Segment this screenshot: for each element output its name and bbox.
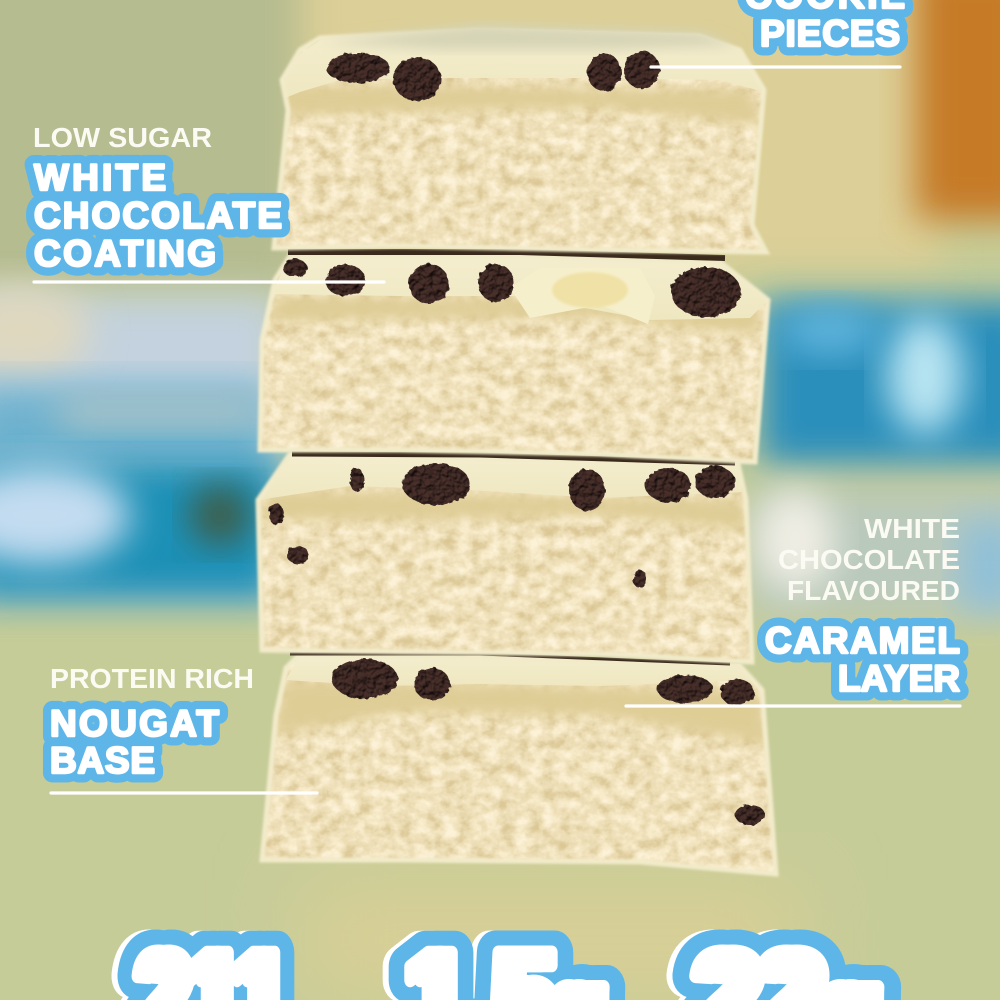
- label: caramel layer: CARAMEL: [765, 620, 960, 661]
- bar 2: second: [260, 252, 768, 462]
- label: cookie pieces: PIECES: [760, 13, 900, 54]
- label: caramel layer: CARAMEL: [765, 620, 960, 661]
- label: caramel layer: WHITE: [864, 513, 960, 544]
- label: cookie pieces: [651, 0, 905, 67]
- label: caramel layer: [626, 513, 960, 706]
- label: white chocolate coating: WHITE: [34, 157, 166, 198]
- label: nougat base: BASE: [50, 740, 155, 781]
- label: cookie pieces: PIECES: [760, 13, 900, 54]
- label: white chocolate coating: CHOCOLATE: [34, 195, 282, 236]
- label: white chocolate coating: CHOCOLATE: [34, 195, 282, 236]
- label: caramel layer: LAYER: [838, 658, 960, 699]
- bar 4: bottom: [262, 652, 776, 874]
- label: caramel layer: LAYER: [838, 658, 960, 699]
- label: white chocolate coating: COATING: [34, 233, 216, 274]
- label: white chocolate coating: WHITE: [34, 157, 166, 198]
- bar 3: third: [258, 454, 752, 662]
- label: nougat base: NOUGAT: [50, 703, 219, 744]
- label: caramel layer: FLAVOURED: [787, 575, 960, 606]
- bar 1: top: [274, 24, 766, 252]
- label: caramel layer: CHOCOLATE: [778, 544, 960, 575]
- label: nougat base: NOUGAT: [50, 703, 219, 744]
- label: nougat base: BASE: [50, 740, 155, 781]
- label: nougat base: PROTEIN RICH: [50, 663, 254, 694]
- label: white chocolate coating: COATING: [34, 233, 216, 274]
- label: nougat base: [50, 663, 317, 793]
- label: white chocolate coating: [33, 122, 384, 282]
- label: white chocolate coating: LOW SUGAR: [33, 122, 212, 153]
